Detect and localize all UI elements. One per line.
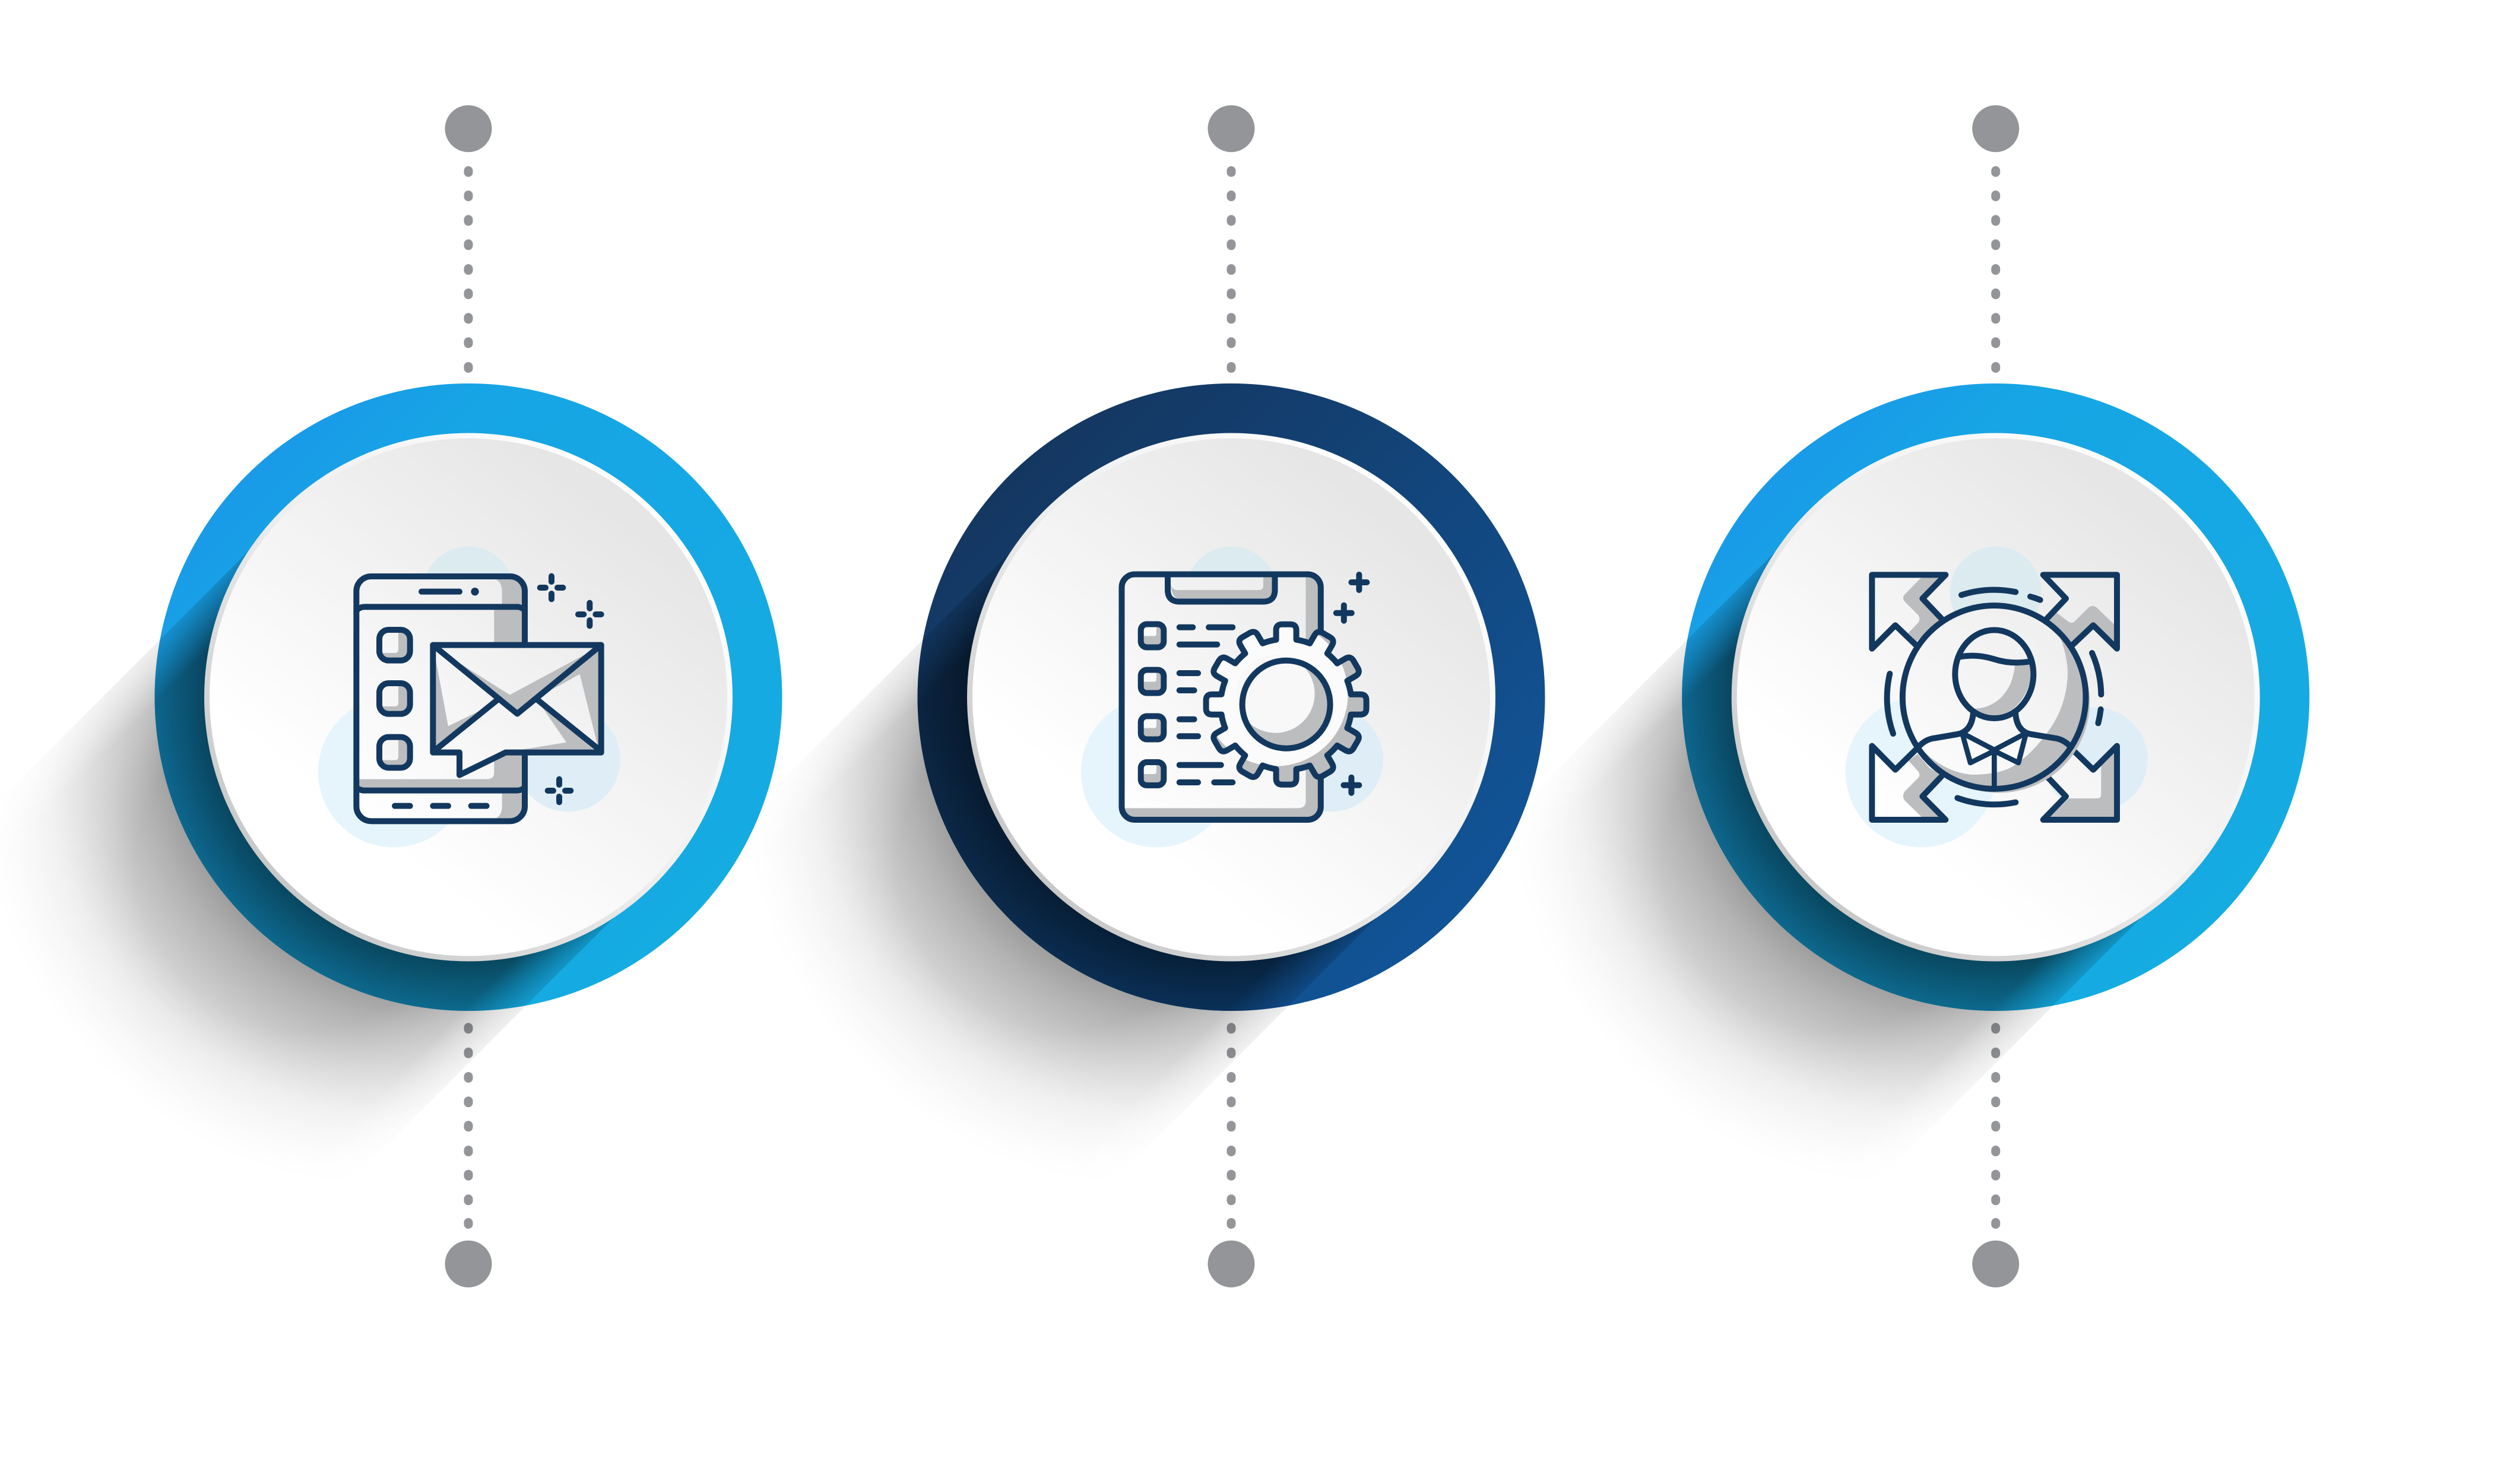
clipboard outline, clip and text lines — [1122, 575, 1321, 820]
gear — [1203, 621, 1367, 786]
circle badge — [34, 383, 782, 1131]
inner disc rim — [967, 433, 1495, 962]
bottom end dot — [1207, 1241, 1255, 1288]
checkbox 4 — [1141, 762, 1164, 785]
envelope shading — [434, 649, 598, 750]
central circle crescent shade — [1922, 634, 2090, 793]
central circle fill — [1903, 605, 2086, 789]
gear hub shade — [1243, 661, 1330, 749]
long diagonal drop shadow — [797, 640, 1289, 1131]
person bow tie fill — [1966, 737, 2023, 763]
app square 1 — [379, 630, 410, 661]
phone outline and bars — [356, 576, 525, 821]
phone camera dot — [471, 588, 479, 595]
dotted connector line with small dots — [1231, 171, 1232, 1224]
dotted connector line with small dots — [1995, 171, 1996, 1224]
top end dot — [1972, 105, 2019, 152]
checkbox 1 — [1141, 624, 1164, 647]
app square 3 — [379, 737, 410, 768]
gear outline — [1205, 623, 1367, 786]
clipboard body — [1122, 575, 1321, 820]
phone body — [356, 576, 525, 821]
icon: phone with envelope message — [356, 576, 601, 821]
shadow falling on ring — [918, 552, 1377, 1011]
person bow tie — [1963, 735, 2026, 788]
column 1: messaging step — [34, 105, 782, 1288]
envelope speech bubble fill — [433, 645, 601, 775]
column 2: checklist settings step — [797, 105, 1545, 1288]
long diagonal drop shadow — [1491, 277, 2417, 1203]
circle badge — [797, 383, 1545, 1131]
inner disc — [210, 438, 727, 956]
sparkles — [540, 576, 601, 802]
pale blue background blobs — [318, 546, 620, 848]
checkbox 2 — [1141, 670, 1164, 693]
inner disc — [972, 438, 1490, 956]
long diagonal drop shadow — [34, 640, 526, 1131]
checkbox 3 — [1141, 716, 1164, 740]
pale blue background blobs — [1846, 546, 2148, 848]
top end dot — [1207, 105, 1255, 152]
app square 2 — [379, 683, 410, 714]
inner disc — [1737, 438, 2255, 956]
inner disc rim — [1732, 433, 2260, 962]
arrow shading — [1903, 578, 2114, 817]
gear hub highlight — [1237, 655, 1315, 733]
clipboard shading — [1124, 577, 1318, 817]
phone shading — [359, 579, 522, 818]
dotted connector line with small dots — [468, 171, 469, 1224]
navy outer ring — [918, 383, 1545, 1011]
light blue outer ring — [1682, 383, 2309, 1011]
circle badge — [1491, 277, 2417, 1203]
shadow falling on ring — [1682, 383, 2309, 1011]
envelope outline — [433, 645, 601, 775]
light blue outer ring — [154, 383, 782, 1011]
gear highlight — [1203, 621, 1348, 766]
bottom end dot — [445, 1241, 492, 1288]
pale blue background blobs — [1081, 546, 1383, 848]
person, circle and hair outlines — [1903, 605, 2086, 789]
dashed arcs around circle — [1887, 590, 2101, 804]
four corner arrows fill — [1872, 575, 2117, 820]
person head shade — [1975, 663, 2031, 715]
shadow falling on ring — [154, 551, 614, 1011]
gear shaded body — [1206, 624, 1367, 785]
arrow outlines — [1872, 575, 2117, 820]
inner disc rim — [204, 433, 733, 962]
top end dot — [445, 105, 492, 152]
bottom end dot — [1972, 1241, 2019, 1288]
plus signs — [1336, 575, 1367, 793]
icon: person in circle with four arrows — [1872, 575, 2117, 820]
column 3: person with expanding arrows step — [1491, 105, 2417, 1288]
icon: clipboard checklist with gear — [1122, 575, 1367, 820]
